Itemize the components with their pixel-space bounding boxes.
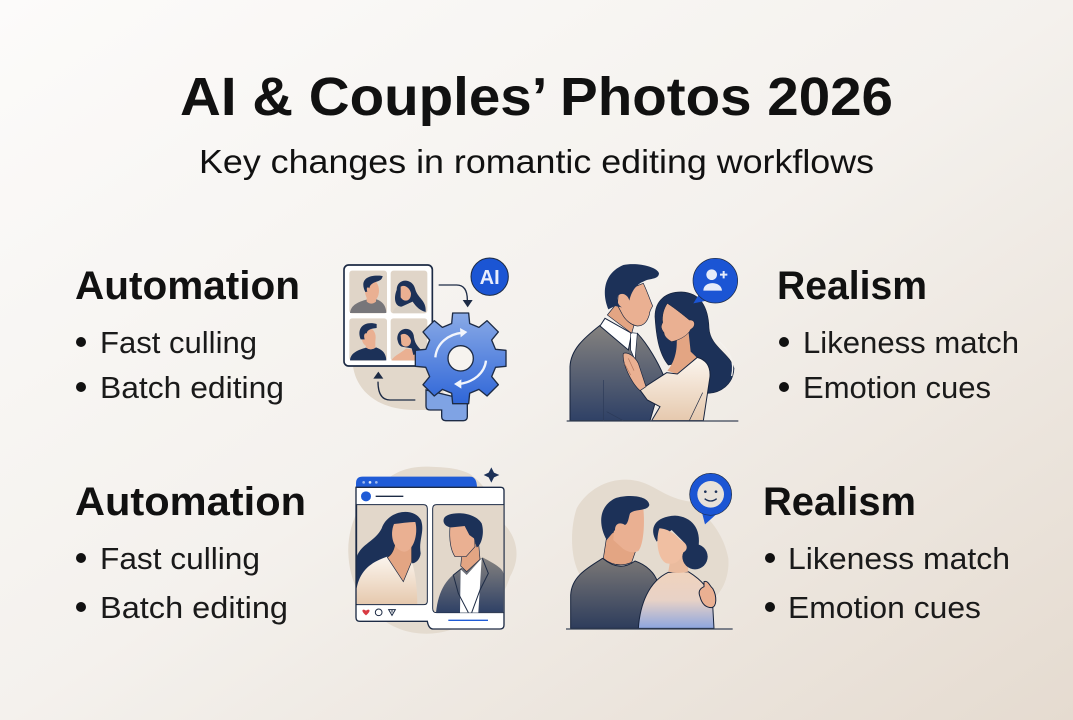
man: [571, 558, 657, 628]
smile bubble: [690, 473, 732, 524]
heading: automation: Automation: [75, 264, 300, 308]
man body: [570, 325, 663, 421]
portrait 4: [391, 349, 420, 360]
icon: photo grid with gear: AI: [480, 267, 500, 289]
portrait 2: [393, 303, 421, 313]
panel: realism bottom: [763, 480, 1010, 625]
portrait 3: [350, 347, 386, 360]
left photo: [357, 505, 427, 605]
woman hair: [357, 512, 422, 593]
bullet: batch editing: Batch editing: [100, 370, 284, 405]
arrows: [439, 285, 467, 300]
woman top: [640, 357, 710, 421]
panel: automation top: [75, 264, 300, 405]
heading: realism: Realism: [763, 480, 916, 524]
man hair: [605, 264, 659, 309]
icon: couple with smile bubble: [566, 473, 733, 629]
bullet: fast culling: Fast culling: [100, 325, 257, 360]
bullet: likeness match: Likeness match: [803, 325, 1019, 360]
panel: automation bottom: [75, 480, 306, 625]
lower tab: [426, 390, 467, 421]
heading: realism: Realism: [777, 264, 927, 308]
gear body: [415, 313, 506, 404]
woman: [638, 572, 714, 628]
woman face and neck: [667, 330, 697, 374]
right photo: [433, 505, 504, 613]
title: AI & Couples’ Photos 2026: [180, 67, 893, 127]
bullet: emotion cues: Emotion cues: [788, 590, 981, 625]
subtitle: Key changes in romantic editing workflows: [199, 143, 874, 180]
bullet: fast culling: Fast culling: [100, 541, 260, 576]
icon: couple embracing: [567, 258, 738, 421]
bullet: likeness match: Likeness match: [788, 541, 1010, 576]
portrait 1: [350, 299, 386, 313]
post actions: [362, 610, 370, 615]
baseline: [566, 627, 733, 631]
baseline: [567, 419, 738, 423]
hand: [623, 353, 646, 391]
person-plus bubble: [693, 258, 738, 303]
icon: social post with couple: [348, 467, 517, 634]
woman hair back: [655, 292, 734, 393]
woman body: [357, 557, 417, 604]
panel: realism top: [777, 264, 1019, 405]
AI badge: [471, 258, 508, 295]
icon: photo grid with gear: [344, 258, 508, 421]
bullet: batch editing: Batch editing: [100, 590, 288, 625]
bullet: emotion cues: Emotion cues: [803, 370, 991, 405]
sparkle: [484, 467, 499, 483]
heading: automation: Automation: [75, 480, 306, 524]
